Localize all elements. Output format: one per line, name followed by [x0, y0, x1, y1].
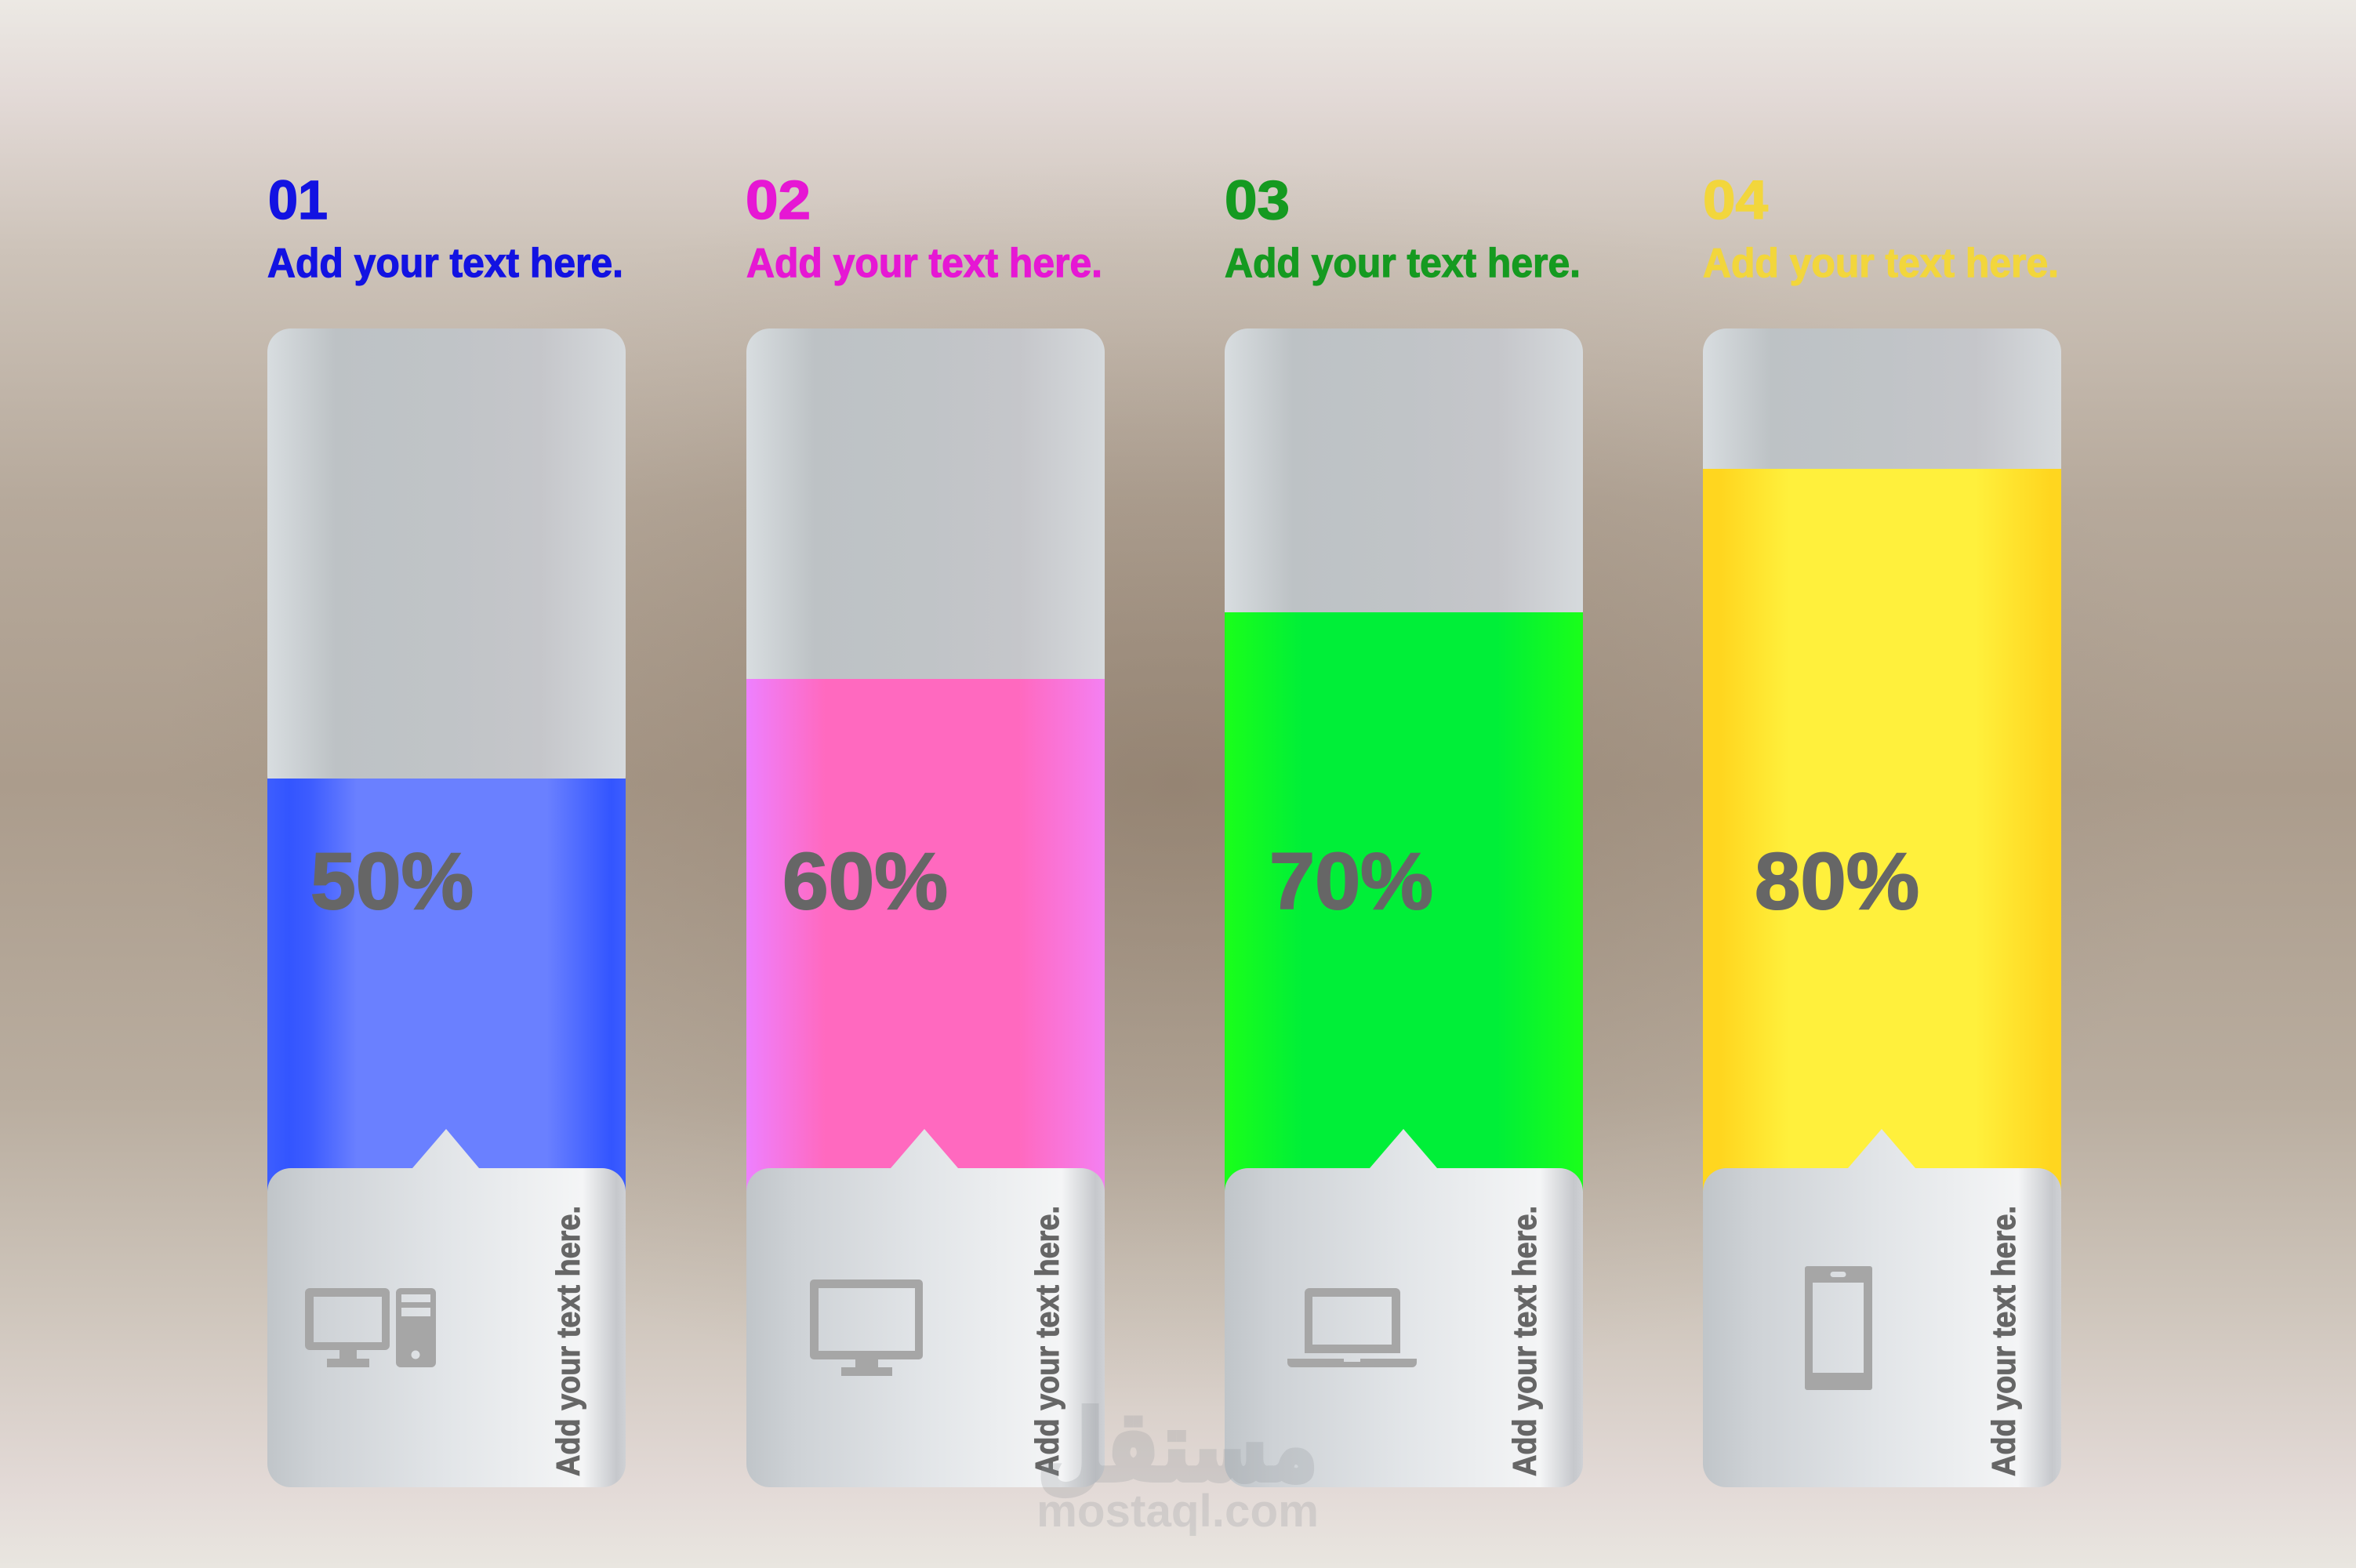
info card 01 — [267, 1129, 626, 1487]
heading 01: Add your text here. — [267, 241, 623, 286]
vertical caption 01: Add your text here. — [550, 1206, 586, 1476]
watermark domain: mostaql.com — [1036, 1486, 1319, 1537]
value 70%: 70% — [1269, 837, 1433, 926]
vertical caption 03: Add your text here. — [1506, 1206, 1543, 1476]
empty gauge track 01 — [267, 328, 626, 799]
icon: desktop computer — [305, 1288, 436, 1367]
gauge fill 50% — [267, 779, 626, 1192]
value 60%: 60% — [782, 837, 948, 926]
empty gauge track 02 — [746, 328, 1105, 799]
empty gauge track 03 — [1225, 328, 1583, 799]
number 01: 01 — [268, 169, 328, 230]
vertical caption 02: Add your text here. — [1029, 1206, 1065, 1476]
heading 04: Add your text here. — [1703, 241, 2059, 286]
vertical caption 04: Add your text here. — [1985, 1206, 2022, 1476]
info card 02 — [746, 1129, 1105, 1487]
panel: column 01 — [267, 169, 626, 1487]
panel: column 03 — [1225, 169, 1583, 1487]
icon: monitor — [810, 1279, 923, 1376]
empty gauge track 04 — [1703, 328, 2061, 799]
heading 03: Add your text here. — [1225, 241, 1581, 286]
gauge fill 70% — [1225, 612, 1583, 1192]
number 02: 02 — [746, 169, 811, 230]
number 03: 03 — [1225, 169, 1290, 230]
info card 04 — [1703, 1129, 2061, 1487]
panel: column 04 — [1703, 169, 2061, 1487]
number 04: 04 — [1703, 169, 1768, 230]
icon: laptop — [1287, 1288, 1417, 1367]
value 50%: 50% — [310, 837, 474, 926]
info card 03 — [1225, 1129, 1583, 1487]
watermark — [1036, 1390, 1319, 1537]
gauge fill 60% — [746, 679, 1105, 1192]
panel: column 02 — [746, 169, 1105, 1487]
gauge fill 80% — [1703, 469, 2061, 1192]
icon: smartphone — [1805, 1266, 1872, 1390]
value 80%: 80% — [1755, 837, 1919, 926]
heading 02: Add your text here. — [746, 241, 1102, 286]
watermark arabic logo: مستقل — [1037, 1390, 1318, 1504]
